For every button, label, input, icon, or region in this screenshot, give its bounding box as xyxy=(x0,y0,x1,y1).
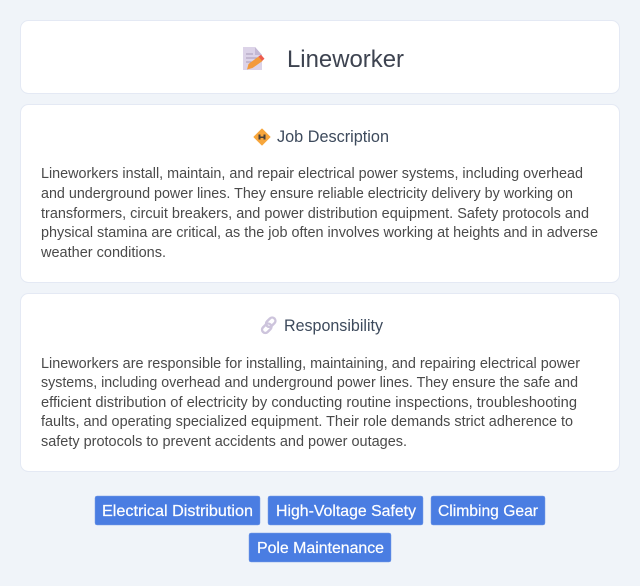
text block: responsibility: faults, and operating specialized equipment. Their role demands strict adherence to xyxy=(41,414,573,430)
panel: job description xyxy=(20,104,620,282)
heading: responsibility: Responsibility xyxy=(284,317,384,335)
text block: responsibility: safety protocols to prevent accidents and power outages. xyxy=(41,434,407,450)
icon: link xyxy=(261,316,277,334)
icon: memo with pencil xyxy=(243,47,264,70)
title: Lineworker xyxy=(287,46,404,73)
text block: job description: physical stamina are critical, as the job often involves working at heights and in adverse xyxy=(41,225,598,241)
text block: responsibility: systems, including overhead and underground power lines. They ensure the safe and xyxy=(41,375,578,391)
heading: job description: Job Description xyxy=(277,128,389,146)
panel: title card xyxy=(20,20,620,94)
icon: construction diamond xyxy=(254,129,270,145)
tag: pole maintenance xyxy=(249,533,391,562)
panel: responsibility xyxy=(20,294,620,472)
text block: job description: and underground power lines. They ensure reliable electricity delivery by working on xyxy=(41,186,573,202)
text block: job description: weather conditions. xyxy=(40,245,166,261)
tag: high-voltage safety xyxy=(268,496,423,525)
tag: high-voltage safety: High-Voltage Safety xyxy=(276,503,416,520)
text block: responsibility: efficient distribution of electricity by conducting routine inspections, troubleshooting xyxy=(41,395,577,411)
tag: climbing gear: Climbing Gear xyxy=(438,503,539,520)
text block: job description: transformers, circuit breakers, and power distribution equipment. Safety protocols and xyxy=(41,206,589,222)
tag: pole maintenance: Pole Maintenance xyxy=(257,540,384,557)
text block: responsibility: Lineworkers are responsible for installing, maintaining, and repairing electrical power xyxy=(41,356,580,372)
text block: responsibility xyxy=(41,356,580,450)
text block: job description: Lineworkers install, maintain, and repair electrical power systems, including overhead xyxy=(41,166,583,182)
tag: electrical distribution xyxy=(95,496,260,525)
tag: climbing gear xyxy=(431,496,545,525)
text block: job description xyxy=(40,166,598,261)
tag: electrical distribution: Electrical Distribution xyxy=(102,503,253,520)
skill tags xyxy=(95,496,545,562)
